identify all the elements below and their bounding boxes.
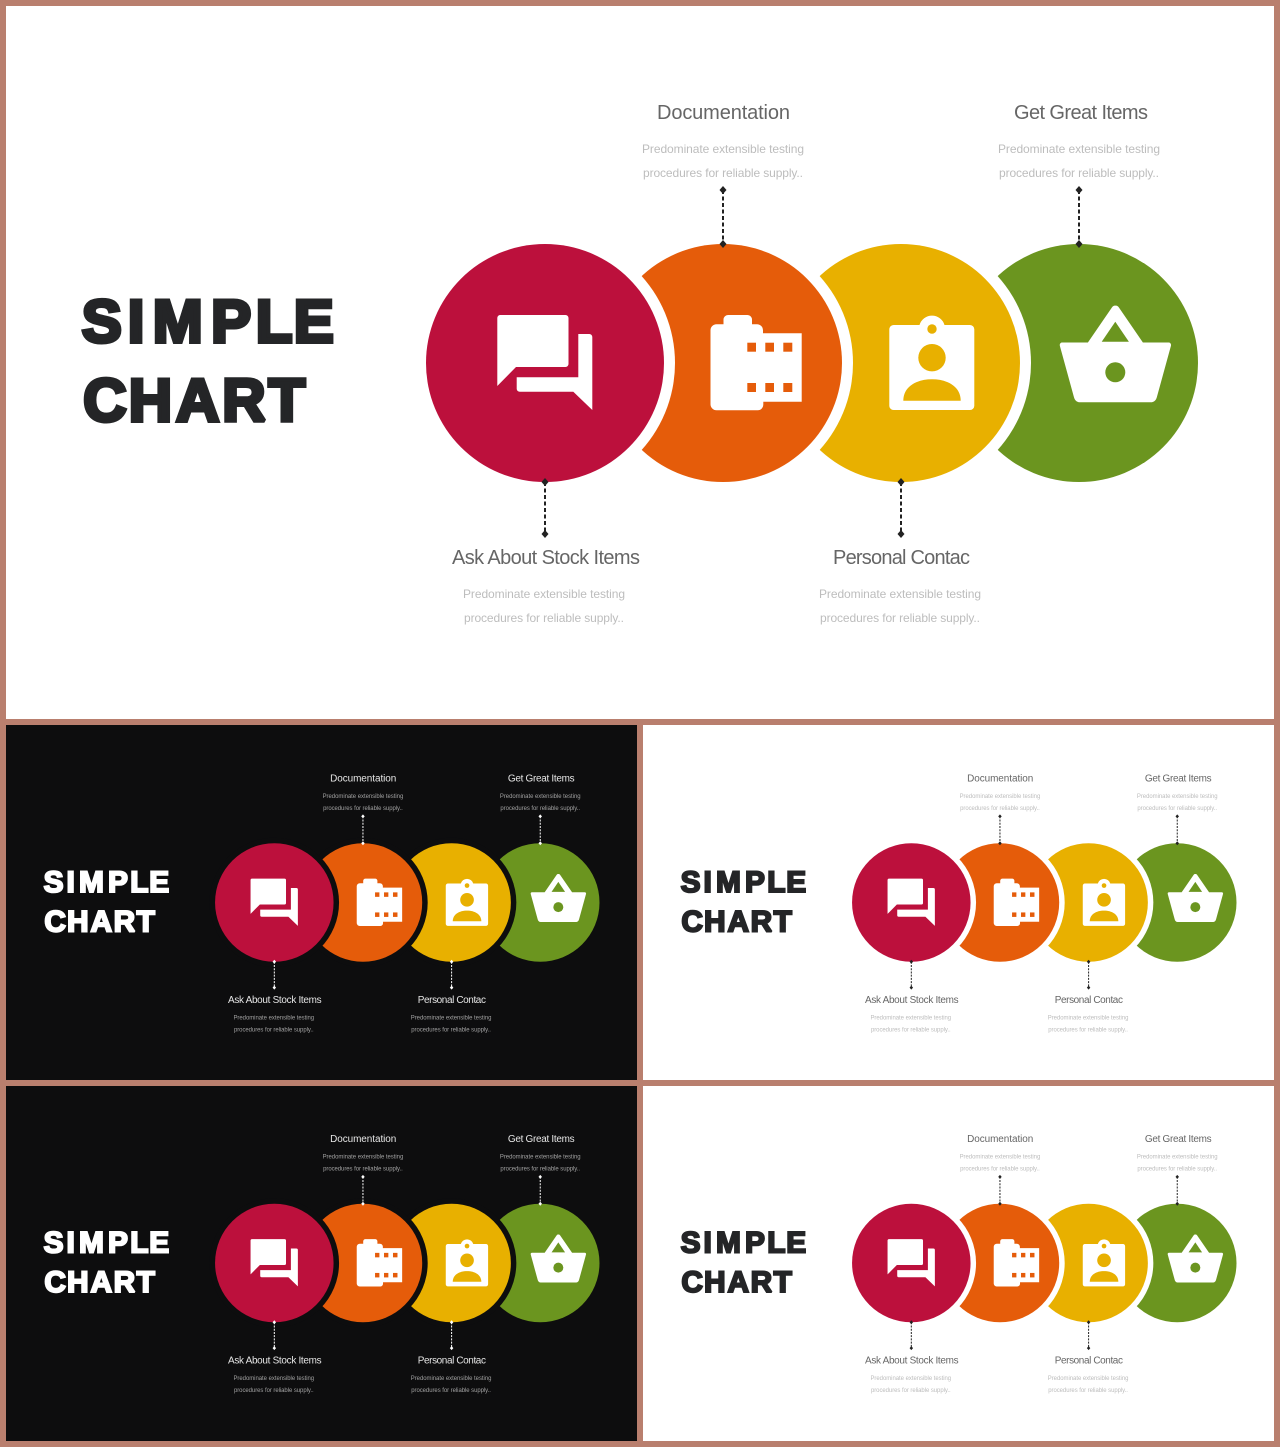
text: ask about stock items: Predominate extensible testing: [870, 1016, 951, 1022]
text: documentation: Documentation: [330, 1134, 396, 1145]
connector: personal contact: [898, 478, 904, 538]
text: get great items: [1137, 774, 1218, 812]
text: get great items: Predominate extensible testing: [998, 142, 1160, 156]
text: ask about stock items: Ask About Stock Items: [228, 995, 322, 1006]
connector: get great items: [1175, 1175, 1179, 1206]
text: documentation: Predominate extensible testing: [642, 142, 804, 156]
title: [44, 866, 169, 938]
text: personal contac: procedures for reliable supply..: [411, 1388, 491, 1394]
text: documentation: Documentation: [657, 102, 790, 124]
circle: green basket: [481, 843, 600, 962]
text: get great items: [500, 774, 581, 812]
circle: orange film: [941, 1204, 1059, 1322]
text: documentation: [960, 1134, 1040, 1172]
text: get great items: Get Great Items: [1145, 1134, 1212, 1145]
text: documentation: [960, 774, 1040, 812]
text: documentation: [323, 774, 403, 812]
text: personal contac: Predominate extensible testing: [819, 587, 981, 601]
title: SIMPLE: [82, 288, 334, 355]
text: get great items: [998, 102, 1160, 180]
text: documentation: Predominate extensible testing: [323, 794, 403, 800]
circle: green basket: [960, 244, 1198, 482]
circle: green basket: [1118, 1204, 1237, 1322]
connector: ask about stock items: [910, 960, 913, 990]
title: [82, 288, 334, 434]
title: SIMPLE: [681, 1227, 806, 1260]
text: get great items: Get Great Items: [508, 774, 575, 785]
text: get great items: [1137, 1134, 1218, 1172]
text: ask about stock items: Predominate extensible testing: [870, 1376, 951, 1382]
text: ask about stock items: [865, 995, 959, 1033]
panel: black chart top left: [6, 725, 637, 1080]
text: get great items: Get Great Items: [1014, 102, 1148, 124]
title: CHART: [44, 1266, 155, 1299]
text: ask about stock items: Ask About Stock Items: [452, 547, 640, 569]
title: [681, 866, 806, 938]
text: personal contac: Personal Contac: [418, 1356, 486, 1367]
circle: red chat: [215, 1204, 334, 1322]
title: CHART: [44, 905, 155, 938]
connector: ask about stock items: [273, 960, 276, 990]
connector: documentation: [720, 186, 726, 248]
text: personal contac: Personal Contac: [1055, 995, 1123, 1006]
circle: yellow badge: [1029, 843, 1148, 962]
circle: yellow badge: [392, 1204, 511, 1322]
text: get great items: Predominate extensible testing: [500, 794, 581, 800]
circle: red chat: [215, 843, 334, 962]
text: personal contac: Predominate extensible testing: [411, 1016, 491, 1022]
text: documentation: Documentation: [967, 774, 1033, 785]
text: documentation: procedures for reliable supply..: [323, 806, 403, 812]
text: personal contac: procedures for reliable supply..: [820, 611, 980, 625]
text: ask about stock items: [865, 1356, 959, 1394]
text: get great items: Predominate extensible testing: [500, 1154, 581, 1160]
text: documentation: procedures for reliable supply..: [960, 1166, 1040, 1172]
text: get great items: Get Great Items: [508, 1134, 575, 1145]
connector: personal contact: [450, 1320, 453, 1350]
circle: yellow badge: [782, 244, 1020, 482]
circle: orange film: [604, 244, 842, 482]
circle: yellow badge: [392, 843, 511, 962]
text: personal contac: Personal Contac: [1055, 1356, 1123, 1367]
title: SIMPLE: [44, 1227, 169, 1260]
text: personal contac: [411, 995, 491, 1033]
text: ask about stock items: Ask About Stock Items: [228, 1356, 322, 1367]
text: personal contac: Personal Contac: [418, 995, 486, 1006]
text: documentation: [642, 102, 804, 180]
text: documentation: Predominate extensible testing: [323, 1154, 403, 1160]
text: ask about stock items: Predominate extensible testing: [233, 1376, 314, 1382]
text: get great items: Get Great Items: [1145, 774, 1212, 785]
text: get great items: Predominate extensible testing: [1137, 794, 1218, 800]
connector: personal contact: [1087, 960, 1090, 990]
connector: get great items: [1175, 814, 1179, 845]
circle: orange film: [304, 1204, 422, 1322]
circle: green basket: [1118, 843, 1237, 962]
text: ask about stock items: [452, 547, 640, 625]
circle: red chat: [852, 843, 971, 962]
text: ask about stock items: procedures for reliable supply..: [871, 1388, 951, 1394]
circle: red chat: [426, 244, 664, 482]
text: ask about stock items: Ask About Stock Items: [865, 995, 959, 1006]
text: personal contac: Predominate extensible testing: [411, 1376, 491, 1382]
title: CHART: [83, 367, 305, 434]
title: CHART: [681, 905, 792, 938]
title: [681, 1227, 806, 1299]
text: get great items: procedures for reliable supply..: [999, 166, 1159, 180]
circle: orange film: [304, 843, 422, 962]
text: ask about stock items: procedures for reliable supply..: [464, 611, 624, 625]
title: SIMPLE: [44, 866, 169, 899]
connector: ask about stock items: [910, 1320, 913, 1350]
panel: white chart bottom right: [643, 1086, 1274, 1441]
text: personal contac: procedures for reliable supply..: [1048, 1388, 1128, 1394]
panel: black chart bottom left: [6, 1086, 637, 1441]
panel: white chart top right: [643, 725, 1274, 1080]
text: documentation: Predominate extensible testing: [960, 794, 1040, 800]
text: documentation: procedures for reliable supply..: [323, 1166, 403, 1172]
text: personal contac: Predominate extensible testing: [1048, 1016, 1128, 1022]
connector: get great items: [538, 1175, 542, 1206]
connector: documentation: [998, 1175, 1002, 1206]
text: personal contac: Predominate extensible testing: [1048, 1376, 1128, 1382]
text: personal contac: [411, 1356, 491, 1394]
text: ask about stock items: [228, 1356, 322, 1394]
connector: get great items: [1076, 186, 1082, 248]
connector: ask about stock items: [273, 1320, 276, 1350]
text: ask about stock items: Ask About Stock Items: [865, 1356, 959, 1367]
connector: documentation: [361, 1175, 365, 1206]
text: ask about stock items: [228, 995, 322, 1033]
text: ask about stock items: Predominate extensible testing: [233, 1016, 314, 1022]
title: [44, 1227, 169, 1299]
text: personal contac: [819, 547, 981, 625]
text: documentation: Documentation: [967, 1134, 1033, 1145]
text: get great items: procedures for reliable supply..: [1137, 1166, 1217, 1172]
connector: documentation: [361, 814, 365, 845]
text: documentation: procedures for reliable supply..: [643, 166, 803, 180]
text: personal contac: [1048, 995, 1128, 1033]
text: get great items: procedures for reliable supply..: [1137, 806, 1217, 812]
text: get great items: [500, 1134, 581, 1172]
text: ask about stock items: procedures for reliable supply..: [871, 1027, 951, 1033]
title: SIMPLE: [681, 866, 806, 899]
text: personal contac: Personal Contac: [833, 547, 970, 569]
text: documentation: Predominate extensible testing: [960, 1154, 1040, 1160]
circle: yellow badge: [1029, 1204, 1148, 1322]
connector: get great items: [538, 814, 542, 845]
text: documentation: [323, 1134, 403, 1172]
text: personal contac: procedures for reliable supply..: [1048, 1027, 1128, 1033]
text: documentation: procedures for reliable supply..: [960, 806, 1040, 812]
text: personal contac: procedures for reliable supply..: [411, 1027, 491, 1033]
text: personal contac: [1048, 1356, 1128, 1394]
circle: orange film: [941, 843, 1059, 962]
text: get great items: procedures for reliable supply..: [500, 1166, 580, 1172]
text: get great items: Predominate extensible testing: [1137, 1154, 1218, 1160]
connector: ask about stock items: [542, 478, 548, 538]
connector: documentation: [998, 814, 1002, 845]
connector: personal contact: [450, 960, 453, 990]
text: ask about stock items: procedures for reliable supply..: [234, 1388, 314, 1394]
text: get great items: procedures for reliable supply..: [500, 806, 580, 812]
text: ask about stock items: Predominate extensible testing: [463, 587, 625, 601]
panel: main white chart: [6, 6, 1274, 719]
text: ask about stock items: procedures for reliable supply..: [234, 1027, 314, 1033]
circle: red chat: [852, 1204, 971, 1322]
circle: green basket: [481, 1204, 600, 1322]
title: CHART: [681, 1266, 792, 1299]
text: documentation: Documentation: [330, 774, 396, 785]
connector: personal contact: [1087, 1320, 1090, 1350]
